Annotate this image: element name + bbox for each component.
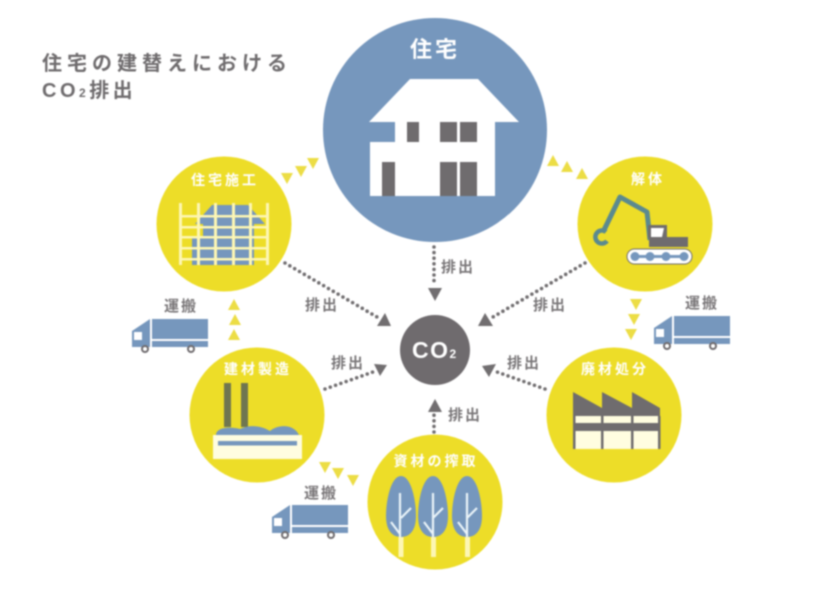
arrow: house to CO2 bbox=[428, 247, 442, 301]
panel: construction: 住宅施工 bbox=[191, 172, 259, 188]
emission labels: 排出 bbox=[448, 406, 482, 424]
panel: materials manufacturing bbox=[190, 348, 324, 482]
panel: materials manufacturing: 建材製造 bbox=[224, 361, 292, 377]
title: CO2排出 bbox=[42, 79, 136, 102]
truck and label: right: 運搬 bbox=[685, 294, 719, 312]
yellow arrows: harvesting to manufacturing bbox=[319, 462, 359, 486]
truck and label: bottom bbox=[272, 484, 348, 538]
yellow arrows: house to demolition bbox=[547, 155, 588, 179]
emission labels: 排出 bbox=[507, 354, 541, 372]
truck and label: bottom: 運搬 bbox=[304, 484, 338, 502]
panel: raw material harvesting bbox=[368, 434, 502, 570]
arrow: construction to CO2 bbox=[285, 263, 391, 326]
arrow: manufacturing to CO2 bbox=[325, 364, 387, 389]
panel: house circle: 住宅 bbox=[410, 37, 460, 62]
panel: house circle bbox=[323, 18, 547, 242]
emission labels: 排出 bbox=[533, 296, 567, 314]
panel: waste disposal: 廃材処分 bbox=[581, 361, 649, 377]
yellow arrows: construction to house bbox=[281, 158, 319, 184]
arrow: demolition to CO2 bbox=[478, 263, 585, 326]
panel: waste disposal bbox=[546, 348, 682, 482]
panel: CO2 circle: CO2 bbox=[412, 337, 458, 363]
truck and label: right bbox=[654, 294, 730, 349]
emission labels: 排出 bbox=[305, 296, 339, 314]
panel: raw material harvesting: 資材の搾取 bbox=[394, 453, 478, 469]
title: 住宅の建替えにおける bbox=[42, 52, 292, 75]
panel: construction bbox=[156, 156, 292, 292]
panel: demolition: 解体 bbox=[631, 171, 665, 187]
arrow: disposal to CO2 bbox=[482, 364, 545, 389]
truck and label: left bbox=[132, 297, 208, 352]
yellow arrows: demolition to disposal bbox=[625, 299, 642, 340]
emission labels bbox=[305, 258, 567, 424]
arrow: harvesting to CO2 bbox=[428, 399, 442, 432]
truck and label: left: 運搬 bbox=[164, 297, 198, 315]
title bbox=[42, 52, 292, 102]
panel: demolition bbox=[578, 156, 712, 292]
emission labels: 排出 bbox=[331, 354, 365, 372]
yellow arrows: manufacturing to construction bbox=[228, 299, 241, 340]
emission labels: 排出 bbox=[441, 258, 475, 276]
panel: CO2 circle bbox=[400, 315, 470, 385]
